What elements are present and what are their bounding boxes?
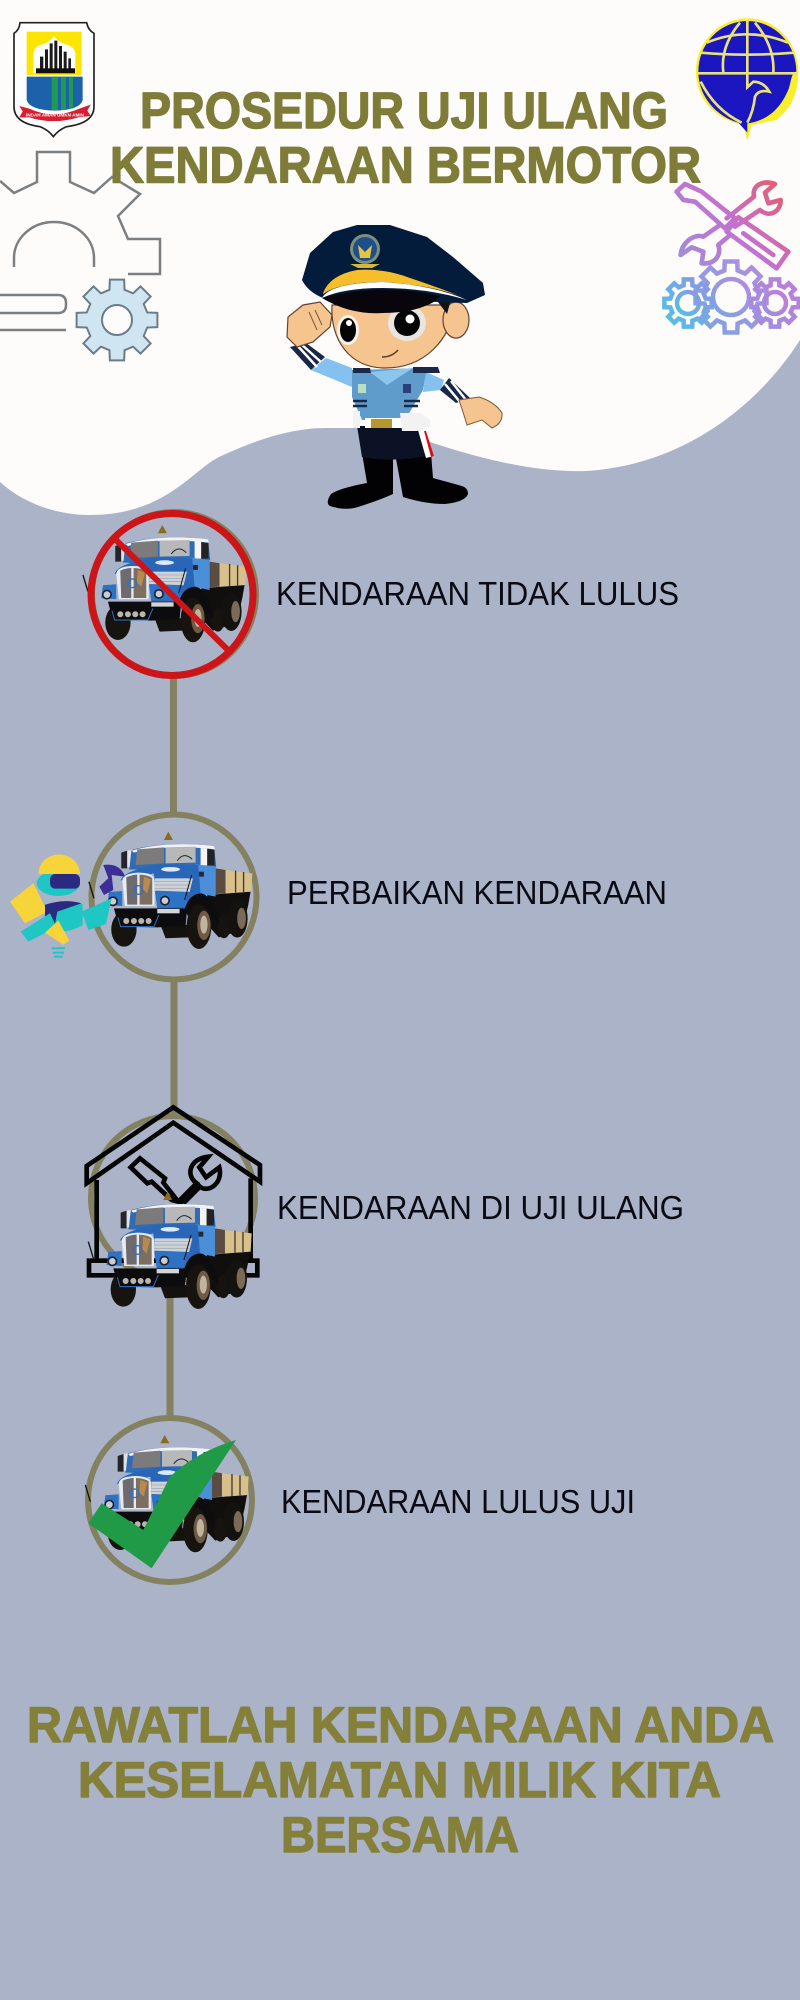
step 4 label: KENDARAAN LULUS UJI	[281, 1483, 635, 1520]
officer head	[332, 305, 455, 368]
logo: regional shield	[14, 23, 94, 137]
icon: crossed tools and gears	[664, 183, 799, 332]
icon: robot mechanic	[10, 854, 125, 957]
icon: small light blue gear	[77, 280, 157, 360]
officer torso	[352, 368, 427, 420]
step 2 label: PERBAIKAN KENDARAAN	[287, 874, 667, 911]
officer raised arm	[311, 358, 352, 387]
step 2: vehicle repair	[10, 814, 257, 980]
icon: green check mark	[88, 1440, 236, 1568]
title: KENDARAAN BERMOTOR	[110, 136, 701, 194]
officer trousers	[357, 426, 431, 460]
step 4: vehicle passes	[85, 1418, 252, 1582]
closing message: KESELAMATAN MILIK KITA	[78, 1752, 721, 1808]
step 3 label: KENDARAAN DI UJI ULANG	[277, 1189, 684, 1226]
step 3: re-test	[87, 1107, 260, 1309]
step 1: vehicle fails	[83, 512, 256, 676]
officer saluting hand	[287, 302, 332, 347]
officer other arm	[423, 372, 444, 392]
officer cap	[302, 225, 485, 303]
closing message: BERSAMA	[281, 1807, 519, 1863]
icon: large outlined gear	[0, 152, 160, 330]
white wavy header shape	[0, 0, 800, 515]
title: PROSEDUR UJI ULANG	[140, 82, 668, 139]
icon: workshop house	[87, 1107, 260, 1275]
closing message: RAWATLAH KENDARAAN ANDA	[27, 1697, 774, 1753]
logo: regional shield: INDAH AMAN UMKN AMIN	[26, 113, 85, 118]
title	[110, 82, 701, 194]
connector lines	[170, 678, 174, 1417]
officer belt and baton	[365, 418, 403, 428]
step 1 label: KENDARAAN TIDAK LULUS	[276, 575, 679, 612]
illustration: saluting officer	[287, 225, 502, 509]
logo: transport ministry globe	[696, 18, 798, 141]
officer boots	[328, 453, 468, 509]
closing message	[27, 1697, 774, 1863]
